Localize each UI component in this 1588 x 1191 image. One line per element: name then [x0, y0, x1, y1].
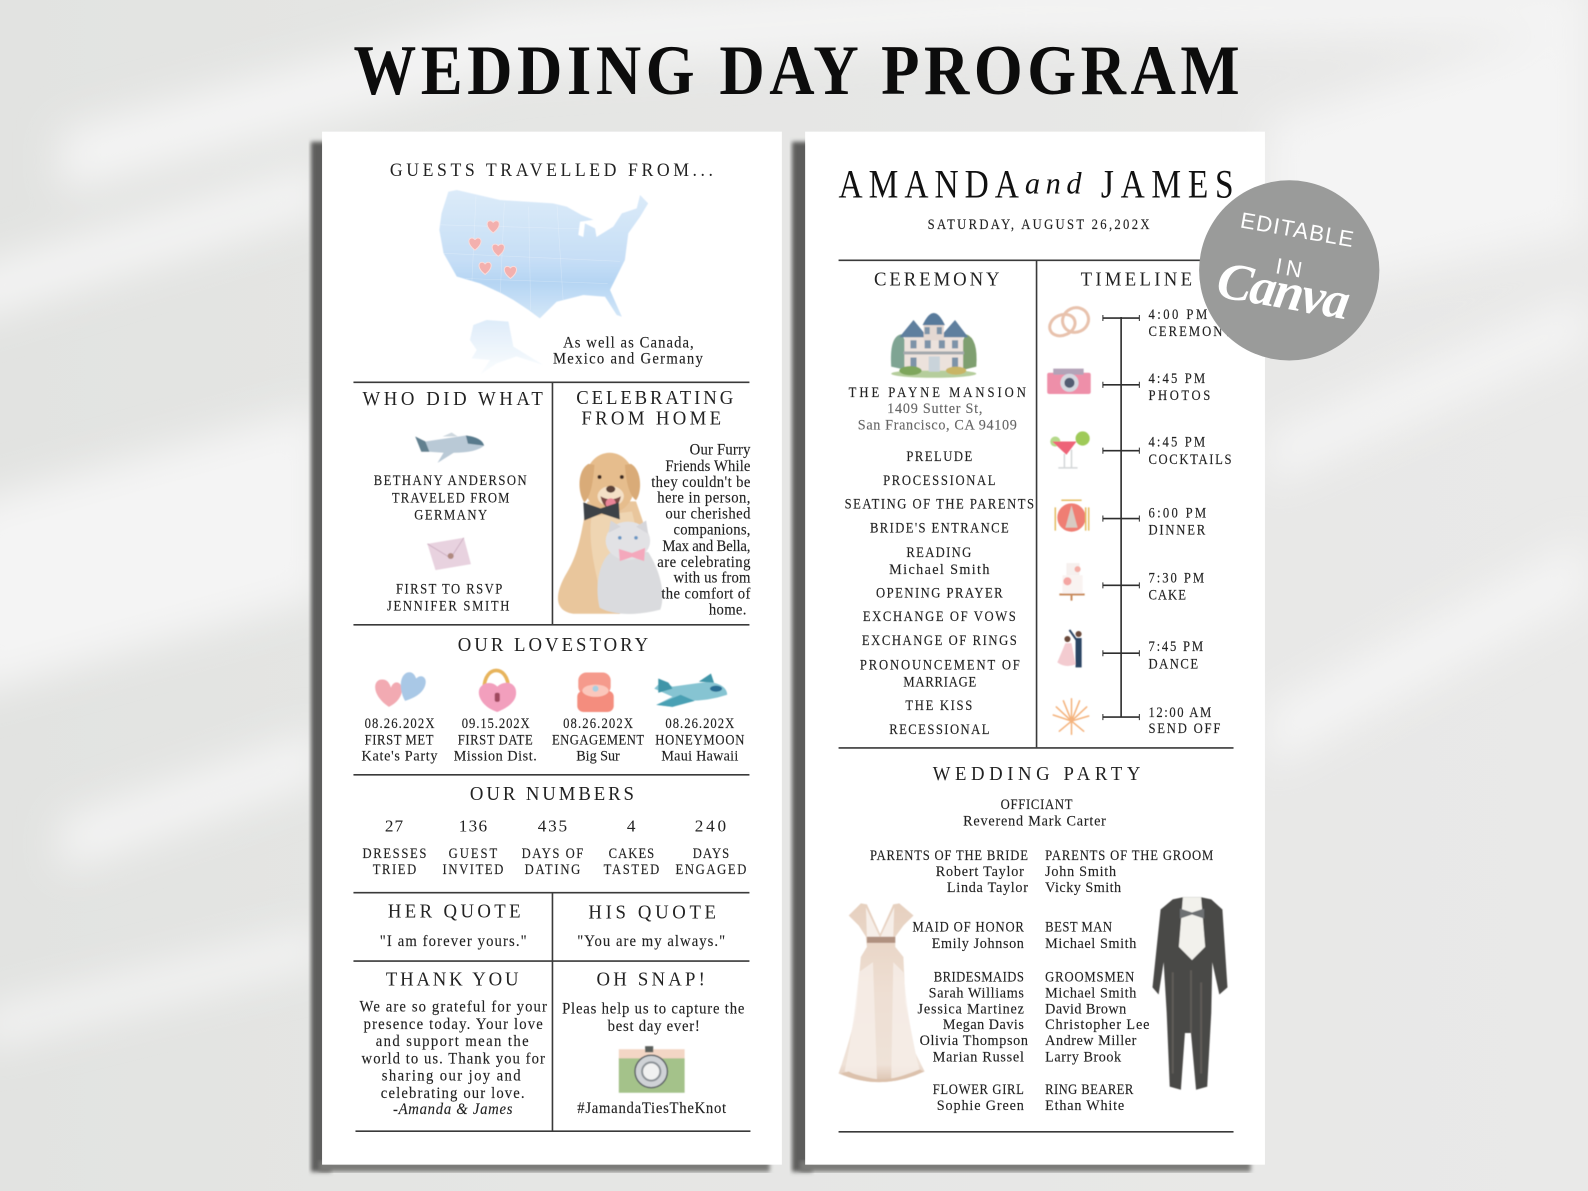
event: send off: SEND OFF [1148, 721, 1221, 736]
stat: dresses: DRESSES [363, 845, 426, 861]
icon: pink camera [1047, 369, 1091, 394]
text: pets [651, 442, 751, 619]
stat: dating [522, 816, 584, 877]
item: honeymoon: Maui Hawaii [661, 748, 738, 765]
section: her quote: "I am forever yours." [380, 934, 527, 950]
bride side names: BRIDESMAIDS [934, 969, 1024, 985]
item: first met: FIRST MET [365, 732, 434, 748]
order of service: PROCESSIONAL [883, 472, 996, 488]
badge: editable in Canva: EDITABLE [1238, 208, 1356, 252]
event: cake: CAKE [1148, 587, 1186, 603]
event: dance: 7:45 PM [1148, 638, 1203, 654]
bride side names: Emily Johnson [932, 936, 1025, 952]
stat: dating: DAYS OF [522, 845, 584, 861]
stat: guests: INVITED [443, 861, 504, 877]
section: thank you: -Amanda & James [393, 1102, 513, 1118]
section: oh snap: #JamandaTiesTheKnot [577, 1101, 727, 1117]
names heading [839, 162, 1234, 206]
venue: 1409 Sutter St, [887, 401, 982, 417]
bride side names [870, 847, 1029, 1114]
event: cocktails [1050, 431, 1232, 468]
section: oh snap: Pleas help us to capture the [562, 1001, 745, 1018]
icon: plate setting [1055, 500, 1089, 532]
heading: OUR NUMBERS [470, 784, 634, 805]
text: RSVP: FIRST TO RSVP [396, 581, 502, 597]
names heading: and [1025, 166, 1082, 200]
bride side names: Megan Davis [943, 1017, 1024, 1033]
stat: dresses [363, 816, 426, 877]
stat: engaged [676, 816, 747, 877]
item: engagement: Big Sur [576, 748, 620, 765]
bride side names: PARENTS OF THE BRIDE [870, 847, 1028, 863]
heading [576, 388, 733, 429]
item: first date: 09.15.202X [462, 715, 530, 731]
stat: engaged: DAYS [693, 845, 729, 861]
bride side names: FLOWER GIRL [933, 1081, 1024, 1097]
groom side names: Vicky Smith [1045, 880, 1122, 896]
card shadow [792, 142, 1251, 1172]
section: thank you: and support mean the [376, 1034, 529, 1050]
bride side names: Linda Taylor [947, 880, 1028, 896]
text: pets: companions, [673, 522, 750, 539]
event: photos: 4:45 PM [1148, 370, 1205, 386]
event: dinner: 6:00 PM [1148, 505, 1206, 521]
icon: wedding cake [1059, 563, 1085, 601]
section: thank you: world to us. Thank you for [362, 1051, 545, 1067]
item: first met: Kate's Party [362, 748, 438, 765]
groom side names: BEST MAN [1045, 919, 1112, 935]
section: thank you: celebrating our love. [381, 1085, 525, 1102]
text: pets: Friends While [665, 459, 751, 475]
names heading: AMANDA [839, 162, 1019, 206]
badge: editable in Canva: IN [1274, 253, 1304, 283]
text: pets: they couldn't be [651, 475, 751, 491]
card sheet [805, 132, 1265, 1165]
heading: GUESTS TRAVELLED FROM... [390, 160, 713, 180]
map of Alaska [470, 320, 543, 375]
stat: guests [443, 816, 504, 877]
order of service: PRONOUNCEMENT OF [860, 657, 1020, 673]
map of the USA [439, 190, 648, 318]
text: pets: our cherished [665, 506, 751, 523]
order of service: BRIDE'S ENTRANCE [870, 520, 1009, 536]
card shadow [311, 142, 770, 1172]
groom side names: Michael Smith [1045, 985, 1137, 1002]
event: photos [1047, 369, 1210, 403]
panel: left card [311, 132, 782, 1172]
officiant: OFFICIANT [1001, 796, 1073, 812]
item: first date [454, 670, 537, 765]
groom side names: David Brown [1045, 1001, 1127, 1018]
section: celebrating from home [558, 388, 751, 619]
icon: two hearts [375, 672, 426, 707]
event: dinner: DINNER [1148, 522, 1205, 538]
text: pets: Our Furry [690, 442, 751, 459]
item: first met: 08.26.202X [365, 715, 435, 731]
item: engagement: 08.26.202X [563, 715, 633, 731]
officiant: Reverend Mark Carter [963, 813, 1106, 829]
event: dinner [1055, 500, 1206, 538]
section: thank you: sharing our joy and [382, 1068, 521, 1085]
bride side names: Jessica Martinez [918, 1001, 1024, 1018]
stat: dating: DATING [525, 861, 581, 877]
section: thank you [360, 969, 547, 1118]
section: his quote [577, 902, 725, 950]
event: photos: PHOTOS [1148, 387, 1210, 403]
venue [849, 384, 1026, 433]
groom side names: Larry Brook [1045, 1049, 1122, 1065]
icon: heart padlock [479, 670, 516, 712]
item: honeymoon [654, 673, 745, 765]
icon: grey airplane [415, 432, 484, 463]
venue: THE PAYNE MANSION [849, 384, 1026, 400]
order of service [845, 448, 1034, 737]
illustration: tuxedo [1153, 897, 1227, 1090]
section: wedding party [839, 763, 1227, 1114]
stat: dresses: TRIED [373, 861, 416, 877]
stat: engaged: 240 [695, 816, 726, 835]
item: honeymoon: HONEYMOON [655, 732, 745, 748]
text: traveled: TRAVELED FROM [392, 490, 509, 505]
section: oh snap: best day ever! [608, 1019, 700, 1035]
order of service: RECESSIONAL [889, 722, 989, 737]
item: engagement: ENGAGEMENT [552, 732, 645, 748]
icon: ring box [577, 672, 614, 712]
map note [553, 335, 703, 368]
map hearts [469, 221, 517, 279]
text: RSVP [387, 581, 510, 614]
order of service: THE KISS [905, 697, 972, 713]
bride side names: Olivia Thompson [920, 1033, 1029, 1049]
text: traveled: GERMANY [414, 507, 487, 523]
groom side names [1045, 847, 1213, 1114]
order of service: SEATING OF THE PARENTS [845, 496, 1034, 512]
section: oh snap [562, 969, 745, 1117]
groom side names: Andrew Miller [1045, 1033, 1136, 1049]
icon: teal airplane [654, 673, 727, 707]
item: first met [362, 672, 438, 765]
stat: engaged: ENGAGED [676, 861, 747, 877]
badge: editable in Canva [1199, 180, 1379, 361]
bride side names: Sarah Williams [929, 985, 1024, 1002]
heading: CEREMONY [874, 269, 1000, 291]
stat: cakes: 4 [627, 816, 636, 835]
date: SATURDAY, AUGUST 26,202X [928, 216, 1150, 232]
section: his quote: HIS QUOTE [588, 902, 716, 924]
stat: cakes: TASTED [604, 861, 660, 877]
groom side names: PARENTS OF THE GROOM [1045, 847, 1213, 863]
order of service: PRELUDE [906, 448, 972, 464]
order of service: EXCHANGE OF VOWS [863, 608, 1016, 624]
icon: pink envelope [427, 538, 471, 570]
section: who did what [363, 389, 543, 614]
names heading: JAMES [1101, 162, 1234, 206]
event: dance [1057, 630, 1203, 672]
stat: dating: 435 [538, 816, 567, 835]
groom side names: GROOMSMEN [1045, 969, 1135, 985]
section: thank you: THANK YOU [386, 969, 519, 990]
stat: guests: 136 [459, 816, 488, 835]
stat: cakes [604, 816, 660, 877]
section: her quote: HER QUOTE [388, 901, 521, 923]
event: cocktails: COCKTAILS [1148, 451, 1232, 467]
item: engagement [552, 672, 645, 765]
map note: As well as Canada, [563, 335, 694, 351]
text: pets: the comfort of [661, 586, 751, 603]
bride side names: Sophie Green [937, 1098, 1025, 1114]
stat: guests: GUEST [449, 845, 498, 861]
section: his quote: "You are my always." [577, 934, 725, 950]
event: ceremony [1046, 303, 1234, 340]
officiant [963, 796, 1106, 829]
order of service: MARRIAGE [903, 674, 976, 690]
section: our lovestory [362, 635, 745, 765]
bride side names: MAID OF HONOR [912, 919, 1024, 935]
text: traveled [374, 472, 527, 523]
groom side names: Michael Smith [1045, 936, 1137, 952]
groom side names: John Smith [1045, 864, 1117, 880]
illustration: mansion [891, 313, 977, 378]
title: WEDDING DAY PROGRAM [353, 32, 1240, 110]
bride side names: Marian Russel [933, 1049, 1024, 1065]
section: thank you: We are so grateful for your [360, 999, 547, 1016]
icon: rings [1046, 303, 1093, 340]
text: RSVP: JENNIFER SMITH [387, 598, 510, 614]
text: pets: here in person, [657, 490, 750, 506]
icon: fireworks [1053, 699, 1089, 734]
event: cake [1059, 563, 1204, 603]
order of service: EXCHANGE OF RINGS [862, 632, 1017, 648]
section: oh snap: OH SNAP! [597, 969, 705, 990]
groom side names: Ethan White [1045, 1098, 1124, 1114]
event: ceremony: CEREMONY [1148, 324, 1234, 339]
card sheet [322, 132, 782, 1165]
illustration: wedding dress [839, 903, 925, 1082]
bride side names: Robert Taylor [936, 864, 1024, 880]
venue: San Francisco, CA 94109 [858, 417, 1017, 433]
event: send off: 12:00 AM [1148, 704, 1211, 720]
event: send off [1053, 699, 1221, 736]
heading: WHO DID WHAT [363, 389, 543, 410]
icon: cocktails [1050, 431, 1090, 468]
event: cake: 7:30 PM [1148, 570, 1204, 586]
order of service: OPENING PRAYER [876, 585, 1003, 601]
panel: right card [792, 132, 1265, 1172]
event: dance: DANCE [1148, 656, 1198, 672]
icon: dancing couple [1057, 630, 1082, 667]
illustration: white cat [597, 521, 662, 614]
text: traveled: BETHANY ANDERSON [374, 472, 527, 488]
heading: FROM HOME [581, 408, 721, 429]
map note: Mexico and Germany [553, 351, 703, 368]
section: her quote [380, 901, 527, 950]
badge: editable in Canva: Canva [1213, 251, 1354, 331]
event: cocktails: 4:45 PM [1148, 434, 1205, 450]
stat: cakes: CAKES [609, 845, 654, 861]
section: our numbers [363, 784, 747, 877]
event: ceremony: 4:00 PM [1148, 306, 1207, 322]
section: guests travelled from [390, 160, 713, 375]
section: thank you: presence today. Your love [364, 1017, 543, 1033]
text: pets: home. [709, 602, 746, 619]
text: pets: Max and Bella, [662, 539, 750, 555]
heading: TIMELINE [1081, 269, 1192, 291]
heading: CELEBRATING [576, 388, 733, 409]
order of service: READING [906, 544, 971, 560]
icon: green camera [619, 1046, 685, 1093]
illustration: golden retriever [558, 453, 648, 614]
item: first date: Mission Dist. [454, 748, 537, 765]
groom side names: RING BEARER [1045, 1081, 1133, 1097]
stat: dresses: 27 [385, 816, 403, 835]
heading: WEDDING PARTY [933, 763, 1140, 785]
order of service: Michael Smith [889, 562, 990, 578]
item: honeymoon: 08.26.202X [665, 715, 734, 731]
text: pets: with us from [673, 570, 751, 586]
heading: OUR LOVESTORY [458, 635, 648, 656]
item: first date: FIRST DATE [458, 732, 533, 748]
section: ceremony [845, 269, 1034, 737]
text: pets: are celebrating [657, 555, 751, 571]
groom side names: Christopher Lee [1045, 1017, 1149, 1033]
timeline axis [1103, 315, 1139, 720]
section: timeline [1046, 269, 1234, 736]
